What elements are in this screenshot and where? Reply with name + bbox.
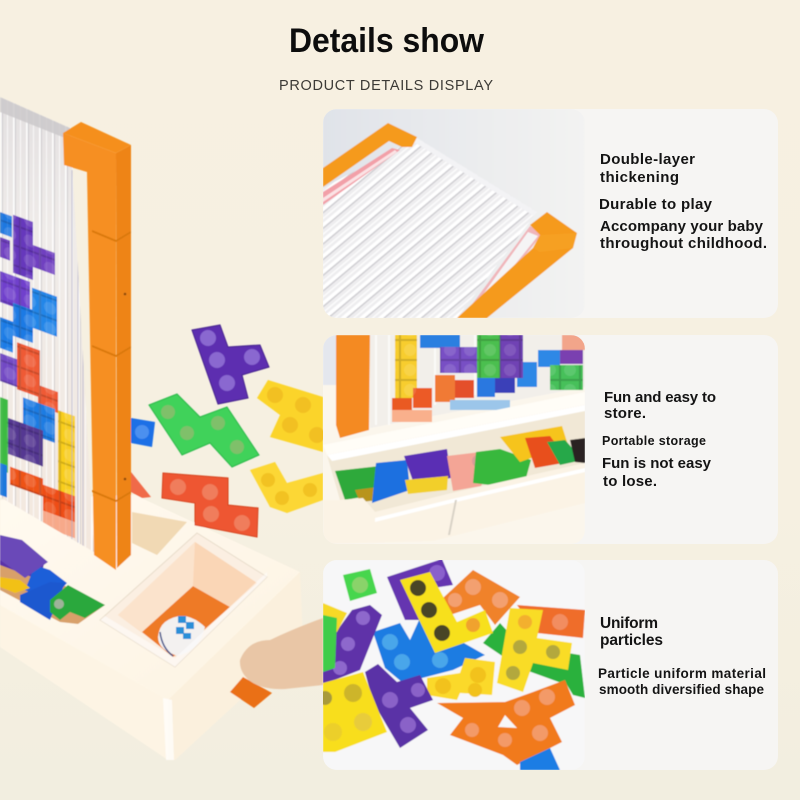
panel text: Uniform (600, 615, 658, 632)
loose blue piece (131, 418, 155, 447)
panel text: Fun and easy to (604, 389, 716, 406)
panel card (323, 335, 778, 544)
panel text: Durable to play (599, 196, 713, 213)
orange frame post (63, 122, 131, 570)
transparent dice box (100, 533, 267, 667)
panel card (323, 109, 778, 318)
panel text: particles (600, 632, 663, 649)
panel card (323, 560, 778, 770)
board blocks (392, 335, 585, 422)
panel: double-layer thickening (323, 109, 778, 318)
orange push tab (230, 677, 272, 708)
panel text: to lose. (603, 473, 657, 490)
panel text: thickening (600, 169, 679, 186)
small red piece (131, 472, 151, 498)
tray well (327, 405, 585, 512)
yellow middle piece (427, 658, 495, 700)
stored pieces (335, 426, 585, 503)
loose red Z piece (162, 473, 258, 537)
subtitle: PRODUCT DETAILS DISPLAY (279, 78, 493, 94)
orange right piece (517, 605, 585, 638)
photo: board frame close-up (323, 109, 585, 318)
yellow big piece (323, 672, 387, 752)
photo: scattered pieces (318, 559, 585, 770)
blue bottom piece (520, 748, 560, 770)
panel text: smooth diversified shape (599, 682, 764, 697)
orange top piece (443, 570, 520, 625)
purple lower piece (365, 664, 433, 748)
panel text: Fun is not easy (602, 455, 712, 472)
orange post (336, 335, 370, 438)
yellow upper-left piece (323, 603, 347, 632)
loose purple T piece (192, 325, 269, 404)
panel text (598, 615, 766, 697)
purple left piece (323, 605, 382, 683)
panel text: Double-layer (600, 151, 695, 168)
panel: uniform particles (318, 559, 778, 770)
panel: portable storage (323, 335, 778, 544)
tray front (344, 476, 527, 502)
green single tile (343, 569, 377, 601)
ledge (323, 392, 585, 455)
green right piece (483, 623, 585, 698)
panel text (602, 389, 716, 490)
panel text: Portable storage (602, 434, 706, 448)
purple top piece (387, 559, 453, 620)
blue piece (373, 618, 485, 683)
ruler marks on right edge (72, 170, 83, 548)
coloured tetris blocks on board (0, 210, 75, 538)
loose green S piece (149, 394, 259, 467)
panel text: Accompany your baby (600, 218, 764, 235)
clear game board (0, 90, 100, 560)
green left piece (323, 615, 337, 672)
main product illustration (0, 90, 325, 760)
yellow right piece (497, 608, 572, 692)
loose yellow L piece (250, 462, 323, 513)
recess behind the board (132, 512, 187, 555)
panel text: throughout childhood. (600, 235, 767, 252)
photo: storage tray (323, 335, 585, 544)
panel text: Particle uniform material (598, 666, 766, 681)
game base (0, 495, 303, 760)
storage tray pieces (0, 535, 105, 624)
panel text: store. (604, 405, 646, 422)
yellow long piece (400, 572, 493, 653)
panel text (599, 151, 767, 252)
title: Details show (289, 22, 484, 60)
dice (158, 616, 205, 656)
orange bottom piece (437, 680, 575, 765)
finger (240, 618, 323, 689)
loose yellow S piece (257, 380, 325, 452)
